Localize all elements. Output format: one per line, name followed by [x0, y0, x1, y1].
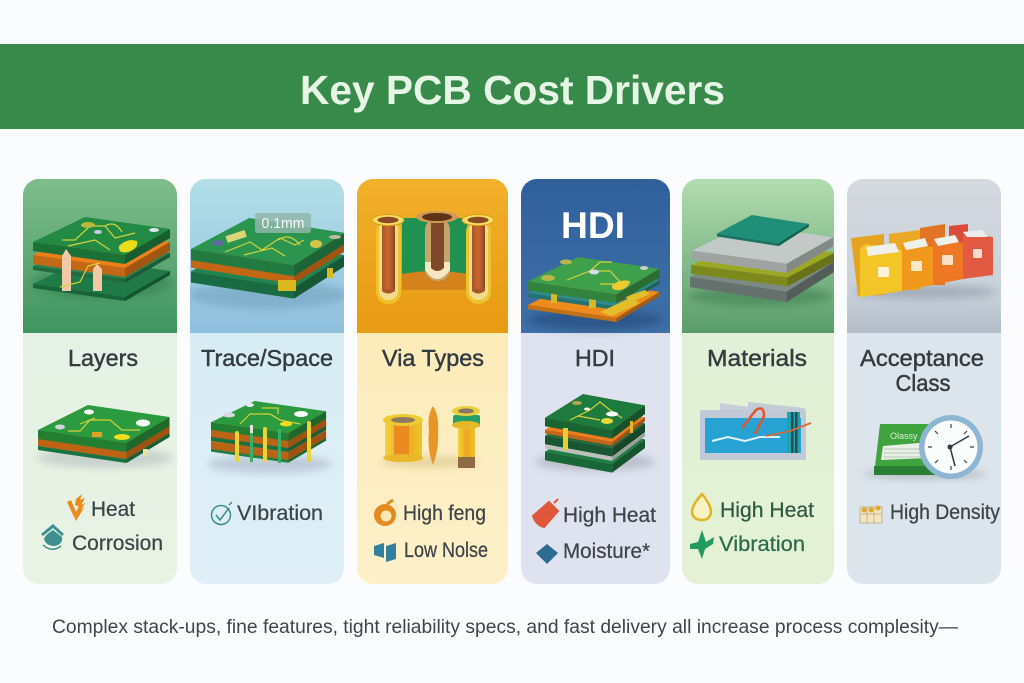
title: Key PCB Cost Drivers [300, 67, 725, 113]
panel: HDI [521, 179, 670, 584]
item: High Heat: High Heat [720, 499, 814, 522]
item: Low Noise: Low Nolse [404, 539, 488, 562]
heading: HDI [575, 345, 615, 371]
heading: Class [896, 370, 950, 396]
illustration: vias [357, 179, 508, 333]
item: High Density: High Density [890, 501, 1000, 524]
heading: Materials [707, 345, 807, 371]
callout: 0.1mm [255, 213, 311, 233]
item: High Heat: High Heat [563, 504, 656, 527]
icon: tag [533, 499, 558, 527]
panel: Trace/Space [188, 179, 348, 584]
heading: Layers [68, 345, 138, 371]
icon: check circle [212, 502, 232, 524]
item: Moisture: Moisture* [563, 540, 650, 563]
illustration: via parts [380, 406, 480, 468]
item: Heat: Heat [91, 498, 135, 521]
folder: amber [902, 238, 933, 291]
title banner [0, 44, 1024, 129]
image title: HDI [561, 205, 625, 246]
callout: 0.1mm: 0.1mm [262, 216, 304, 232]
icon: heat [67, 494, 85, 521]
item: Corrosion [41, 524, 163, 555]
illustration: stacked layers [23, 179, 177, 333]
clock [919, 415, 983, 479]
item: Vibration [690, 530, 805, 559]
folder: red [963, 230, 993, 279]
illustration: HDI board [535, 394, 655, 473]
icon: corrosion [41, 524, 64, 549]
item: Vibration: VIbration [237, 502, 323, 525]
item: High Heat [533, 499, 656, 527]
panel: Layers [23, 179, 177, 584]
via: right [462, 214, 494, 304]
pin [428, 406, 438, 465]
item: High feng: High feng [403, 502, 486, 525]
panel: Via Types [357, 179, 508, 584]
folder: orange [933, 235, 963, 285]
panel: Acceptance Class [847, 179, 1001, 584]
illustration: many-layer board [208, 401, 332, 473]
icon: diamond [536, 544, 558, 564]
item: Corrosion: Corrosion [72, 532, 163, 555]
cylinder [383, 414, 423, 462]
item: High Heat [692, 494, 814, 522]
item: Low Noise [374, 539, 488, 562]
heading: Via Types [382, 345, 484, 371]
via: left [372, 214, 404, 304]
panel: Materials [682, 179, 835, 584]
icon: panels [374, 543, 396, 562]
illustration: HDI stack [521, 179, 670, 333]
folder: yellow [860, 243, 902, 297]
heading: Acceptance [860, 345, 984, 371]
item: Vibration: Vibration [719, 533, 805, 556]
heading [860, 345, 984, 396]
illustration: spec book and clock [863, 415, 987, 479]
illustration: folders [847, 179, 1001, 333]
illustration: datasheet chart [700, 402, 811, 460]
illustration: board [37, 405, 173, 468]
icon: bowl [374, 500, 396, 526]
footer caption: Complex stack-ups, fine features, tight reliability specs, and fast delivery all increase process complesity— [52, 617, 958, 638]
icon: plant wave [690, 530, 714, 559]
illustration: material sheets [682, 179, 835, 333]
plug [452, 406, 480, 468]
illustration: fine traces [188, 179, 348, 333]
icon: drop [692, 494, 711, 520]
illustration: spec book and clock: Olassy [890, 431, 918, 441]
icon: chart grid [860, 506, 882, 523]
heading: Trace/Space [201, 345, 333, 371]
item: Heat [67, 494, 135, 521]
via: middle [416, 211, 458, 281]
item: High feng [374, 500, 486, 526]
